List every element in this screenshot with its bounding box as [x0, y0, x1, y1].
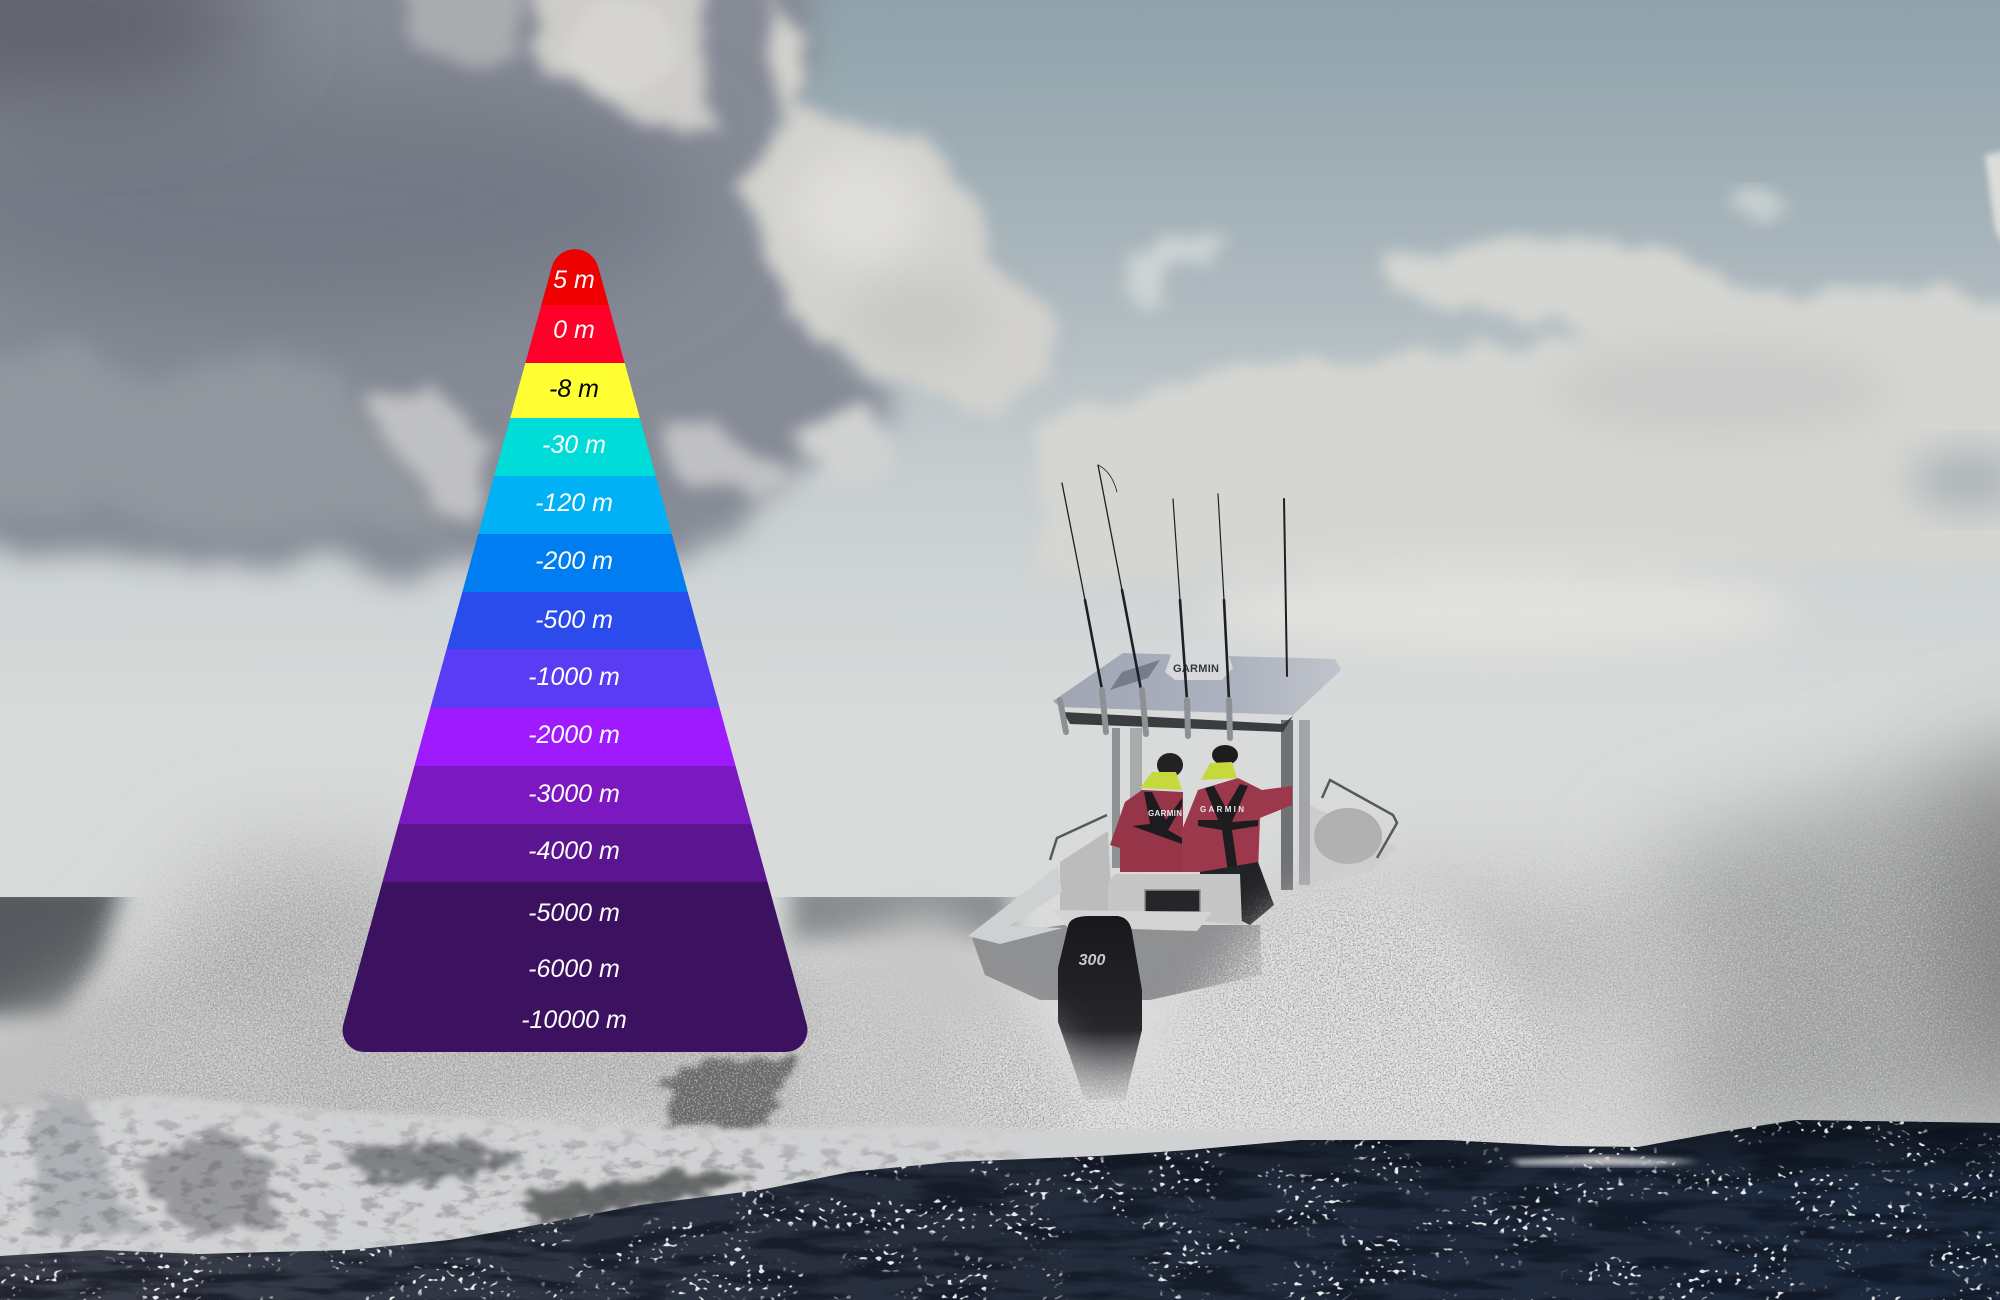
spray: droplet speckle [30, 808, 2000, 1147]
spray: white burst beside boat [935, 856, 1564, 1142]
clouds: white top centre [400, 0, 720, 130]
depth labels: 0 m [553, 316, 595, 344]
crew: right person: GARMIN [1200, 805, 1244, 814]
depth labels: -3000 m [528, 780, 620, 808]
depth labels: -30 m [542, 431, 606, 459]
radar dome [1165, 643, 1233, 680]
gunwale deck [968, 866, 1063, 944]
boat: centre console with fishing rods [968, 465, 1397, 1100]
depth labels: -1000 m [528, 663, 620, 691]
railings [1050, 780, 1397, 860]
depth labels [521, 266, 627, 1034]
spray: grey haze right of the boat [1220, 720, 2000, 1150]
horizon and distant sea [0, 880, 1010, 1020]
crew: left person: GARMIN [1148, 809, 1182, 818]
depth labels: -200 m [535, 547, 613, 575]
depth labels: -4000 m [528, 837, 620, 865]
crew: left person [1110, 753, 1183, 872]
hull transom [972, 925, 1262, 1000]
depth scale pyramid [330, 245, 820, 1057]
depth labels: -500 m [535, 606, 613, 634]
spray: left plume [0, 860, 1060, 1180]
fishing rods and antenna [1060, 465, 1287, 738]
depth labels: -2000 m [528, 721, 620, 749]
T-top hardtop [1053, 653, 1341, 732]
clouds: stratus banks on the right [1040, 150, 2000, 655]
T-top posts [1112, 720, 1310, 890]
clouds: small puffs beside the scale [370, 390, 900, 520]
console screen [1145, 890, 1200, 912]
cockpit interior right [1300, 800, 1397, 890]
colour bands [330, 245, 820, 1057]
depth labels: -120 m [535, 489, 613, 517]
radar dome: GARMIN [1173, 663, 1219, 675]
rear seat console [1108, 874, 1242, 925]
clouds: big white cumulus [730, 0, 1050, 420]
cockpit interior left [1060, 831, 1112, 912]
depth labels: 5 m [553, 266, 595, 294]
storm cloud: dark mass upper left [0, 0, 900, 572]
depth labels: -10000 m [521, 1006, 627, 1034]
swim step tray [1052, 910, 1212, 931]
outboard motor [1058, 916, 1142, 1100]
outboard motor: 300 [1079, 952, 1105, 969]
depth labels: -5000 m [528, 899, 620, 927]
foam: churned wake [0, 1092, 1427, 1256]
depth labels: -6000 m [528, 955, 620, 983]
depth labels: -8 m [549, 375, 599, 403]
sea: dark water surface [0, 1100, 2000, 1300]
crew: right person [1182, 745, 1292, 925]
